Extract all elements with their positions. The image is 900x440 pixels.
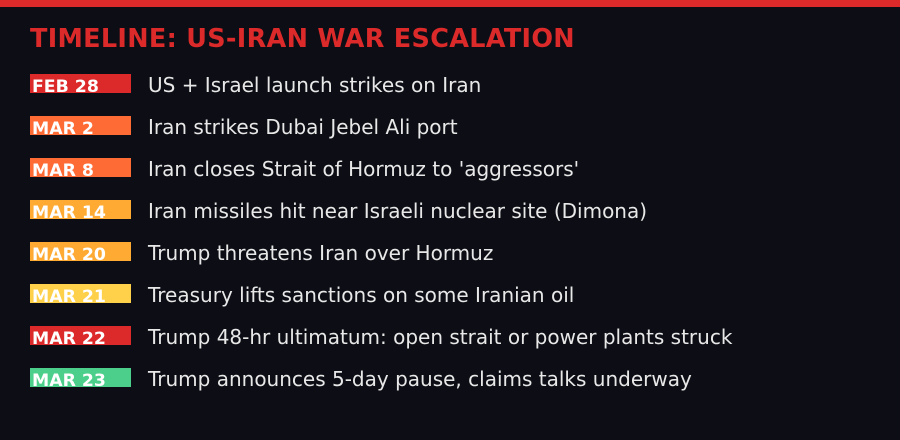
event: Mar 20: MAR 20 bbox=[32, 245, 106, 265]
event: Mar 8: MAR 8 bbox=[32, 161, 94, 181]
event: Mar 21: Treasury lifts sanctions on some Iranian oil bbox=[148, 283, 574, 307]
event: Feb 28: FEB 28 bbox=[32, 77, 99, 97]
event: Mar 8: Iran closes Strait of Hormuz to 'aggressors' bbox=[148, 157, 579, 181]
event: Mar 21: MAR 21 bbox=[32, 287, 106, 307]
event: Mar 23: Trump announces 5-day pause, claims talks underway bbox=[148, 367, 692, 391]
event: Mar 2: MAR 2 bbox=[32, 119, 94, 139]
event: Mar 23: MAR 23 bbox=[32, 371, 106, 391]
event: Mar 2: Iran strikes Dubai Jebel Ali port bbox=[148, 115, 458, 139]
event: Mar 22: MAR 22 bbox=[32, 329, 106, 349]
event: Mar 14: Iran missiles hit near Israeli nuclear site (Dimona) bbox=[148, 199, 647, 223]
event: Mar 20: Trump threatens Iran over Hormuz bbox=[148, 241, 493, 265]
title: TIMELINE: US-IRAN WAR ESCALATION bbox=[30, 24, 575, 54]
event: Feb 28: US + Israel launch strikes on Iran bbox=[148, 73, 481, 97]
event: Mar 14: MAR 14 bbox=[32, 203, 106, 223]
event: Mar 22: Trump 48-hr ultimatum: open strait or power plants struck bbox=[148, 325, 732, 349]
